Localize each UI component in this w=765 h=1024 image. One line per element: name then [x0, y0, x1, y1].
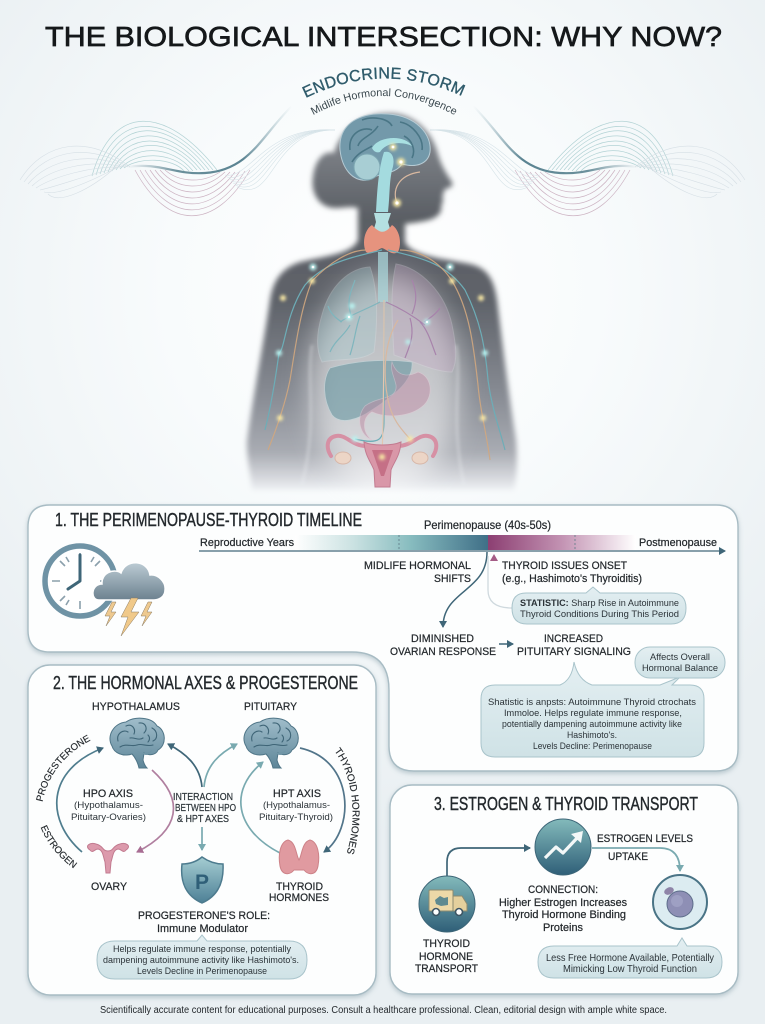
progesterone's role [138, 910, 270, 935]
arrow: transport to estrogen [447, 848, 530, 877]
midlife shifts label [364, 560, 471, 585]
icon: hypothalamus brain [110, 718, 164, 768]
pituitary label: PITUITARY [244, 701, 298, 713]
callout: immune modulator [97, 935, 307, 979]
interaction text: & HPT AXES [177, 814, 229, 825]
brain [340, 114, 430, 212]
ovary label: OVARY [91, 881, 128, 893]
callout: statistic: Thyroid Conditions During This Period [520, 609, 679, 620]
thyroid hormone transport label: THYROID [423, 938, 470, 950]
title: THE BIOLOGICAL INTERSECTION: WHY NOW? [45, 21, 722, 52]
figure arc title [302, 67, 466, 115]
icon: truck [419, 876, 475, 932]
thyroid hormone transport label: HORMONE [419, 951, 473, 963]
diminished ovarian response: DIMINISHED [411, 633, 474, 645]
callout: detail statistic: Immoloe. Helps regulate immune response, [504, 708, 682, 719]
callout: affects balance [635, 647, 725, 678]
icon: ovary [88, 843, 128, 873]
callout: statistic [512, 587, 686, 624]
thyroid hormones label [269, 881, 329, 904]
arm separation [302, 345, 464, 485]
connection text: Proteins [543, 922, 583, 934]
timeline bar postmenopause [488, 535, 636, 550]
uterus and ovaries [328, 436, 436, 487]
midlife shifts label: SHIFTS [434, 573, 471, 585]
progesterone arc label [36, 734, 90, 868]
connection text [499, 884, 627, 934]
icon: pituitary brain [244, 718, 298, 768]
torso light glow [310, 275, 460, 495]
glowing hormone dots [276, 144, 488, 460]
callout: less free hormone: Less Free Hormone Available, Potentially [546, 952, 715, 964]
callout: less free hormone: Mimicking Low Thyroid Function [563, 963, 697, 975]
postmenopause: Postmenopause [639, 537, 717, 549]
estrogen levels uptake labels: UPTAKE [608, 851, 648, 863]
callout: immune modulator: dampening autoimmune activity like Hashimoto's. [103, 955, 299, 966]
progesterone arc label: PROGESTERONE [36, 734, 90, 802]
callout: affects balance: Hormonal Balance [642, 663, 718, 674]
icon: rising estrogen chart [535, 819, 591, 875]
callout: less free hormone [538, 938, 722, 978]
thyroid issues onset: THYROID ISSUES ONSET [502, 560, 627, 572]
timeline axis [199, 550, 725, 552]
thyroid hormone transport label: TRANSPORT [415, 963, 478, 975]
icon: thyroid [279, 840, 319, 874]
liver and stomach [325, 360, 430, 440]
perimenopause label: Perimenopause (40s-50s) [424, 518, 551, 532]
hypothalamus label: HYPOTHALAMUS [92, 701, 180, 713]
heading 2: 2. THE HORMONAL AXES & PROGESTERONE [53, 673, 358, 693]
lungs [318, 264, 456, 372]
diminished ovarian response: OVARIAN RESPONSE [390, 646, 496, 658]
callout: statistic: STATISTIC: Sharp Rise in Autoimmune [520, 598, 679, 609]
thyroid issues onset: (e.g., Hashimoto's Thyroiditis) [502, 573, 642, 585]
thyroid gland [364, 213, 400, 302]
icon: clock [45, 546, 115, 616]
thyroid hormones arc label: THYROID HORMONES [336, 746, 360, 854]
footer note: Scientifically accurate content for educational purposes. Consult a healthcare professional. Clean, editorial design with ample white space. [100, 1005, 667, 1016]
callout: detail statistic: Hashimoto's. [567, 730, 617, 741]
estrogen levels uptake labels: ESTROGEN LEVELS [597, 833, 693, 845]
heading 3: 3. ESTROGEN & THYROID TRANSPORT [434, 794, 698, 814]
callout: immune modulator: Helps regulate immune response, potentially [113, 944, 291, 955]
panel 3: estrogen and thyroid transport [390, 785, 738, 994]
thyroid issues onset [502, 560, 642, 585]
timeline bar perimenopause [295, 535, 488, 550]
connection text: CONNECTION: [528, 884, 598, 896]
body silhouette [247, 113, 517, 490]
hpo axis text: HPO AXIS [83, 788, 133, 800]
interaction text: BETWEEN HPO [175, 803, 236, 814]
progesterone's role: PROGESTERONE'S ROLE: [138, 910, 270, 922]
estrogen arc label: ESTROGEN [40, 825, 78, 868]
interaction arrows [168, 744, 237, 850]
increased pituitary signaling [517, 633, 631, 658]
connection text: Thyroid Hormone Binding [502, 909, 626, 921]
arrow: response to signaling [499, 643, 513, 645]
arrow: estrogen to cell [592, 848, 680, 871]
callout: affects balance: Affects Overall [650, 652, 710, 663]
reproductive years: Reproductive Years [200, 537, 294, 549]
icon: storm cloud [93, 563, 165, 636]
icon: progesterone shield: P [195, 871, 209, 894]
callout: immune modulator: Levels Decline in Perimenopause [137, 966, 267, 977]
interaction text: INTERACTION [173, 792, 233, 803]
diminished ovarian response [390, 633, 496, 658]
hpo axis loop arrows [57, 748, 173, 852]
hpt axis text [259, 788, 333, 823]
hpt axis text: HPT AXIS [273, 788, 321, 800]
icon: cell [653, 875, 707, 929]
connection text: Higher Estrogen Increases [499, 897, 627, 909]
hpt axis text: (Hypothalamus- [263, 800, 330, 811]
panel 1: the perimenopause-thyroid timeline [28, 505, 738, 771]
subtitle: Midlife Hormonal Convergence [310, 88, 456, 115]
callout: detail statistic [481, 662, 704, 757]
increased pituitary signaling: PITUITARY SIGNALING [517, 646, 631, 658]
thyroid hormones label: THYROID [276, 881, 323, 893]
hpt axis text: Pituitary-Thyroid) [259, 812, 333, 823]
nerve pathways [265, 172, 505, 460]
hpo axis text [71, 788, 146, 823]
hpo axis text: (Hypothalamus- [74, 800, 143, 811]
endocrine storm label: ENDOCRINE STORM [302, 67, 466, 98]
hpo axis text: Pituitary-Ovaries) [71, 812, 146, 823]
onset marker [490, 554, 498, 561]
hormonal wave right [430, 106, 745, 216]
increased pituitary signaling: INCREASED [544, 633, 603, 645]
icon: progesterone shield [182, 857, 223, 903]
progesterone's role: Immune Modulator [157, 923, 248, 935]
callout: detail statistic: Shatistic is anpsts: Autoimmune Thyroid ctrochats [488, 697, 696, 708]
estrogen levels uptake labels [597, 833, 693, 863]
midlife shifts label: MIDLIFE HORMONAL [364, 560, 471, 572]
thyroid hormones label: HORMONES [269, 892, 329, 904]
arrow: shifts to ovarian response [443, 552, 487, 627]
thyroid hormone transport label [415, 938, 478, 975]
timeline [199, 518, 725, 551]
hormonal wave left [20, 106, 335, 216]
connector to statistic [488, 556, 512, 608]
figure: endocrine body illustration [247, 113, 517, 495]
panel 2: the hormonal axes and progesterone [25, 664, 379, 1000]
callout: detail statistic: Levels Decline: Perimenopause [533, 741, 652, 752]
callout: detail statistic: potentially dampening autoimmune activity like [502, 719, 682, 730]
hpt axis loop arrows [241, 748, 345, 853]
interaction text [173, 792, 236, 825]
heading 1: 1. THE PERIMENOPAUSE-THYROID TIMELINE [55, 510, 362, 530]
